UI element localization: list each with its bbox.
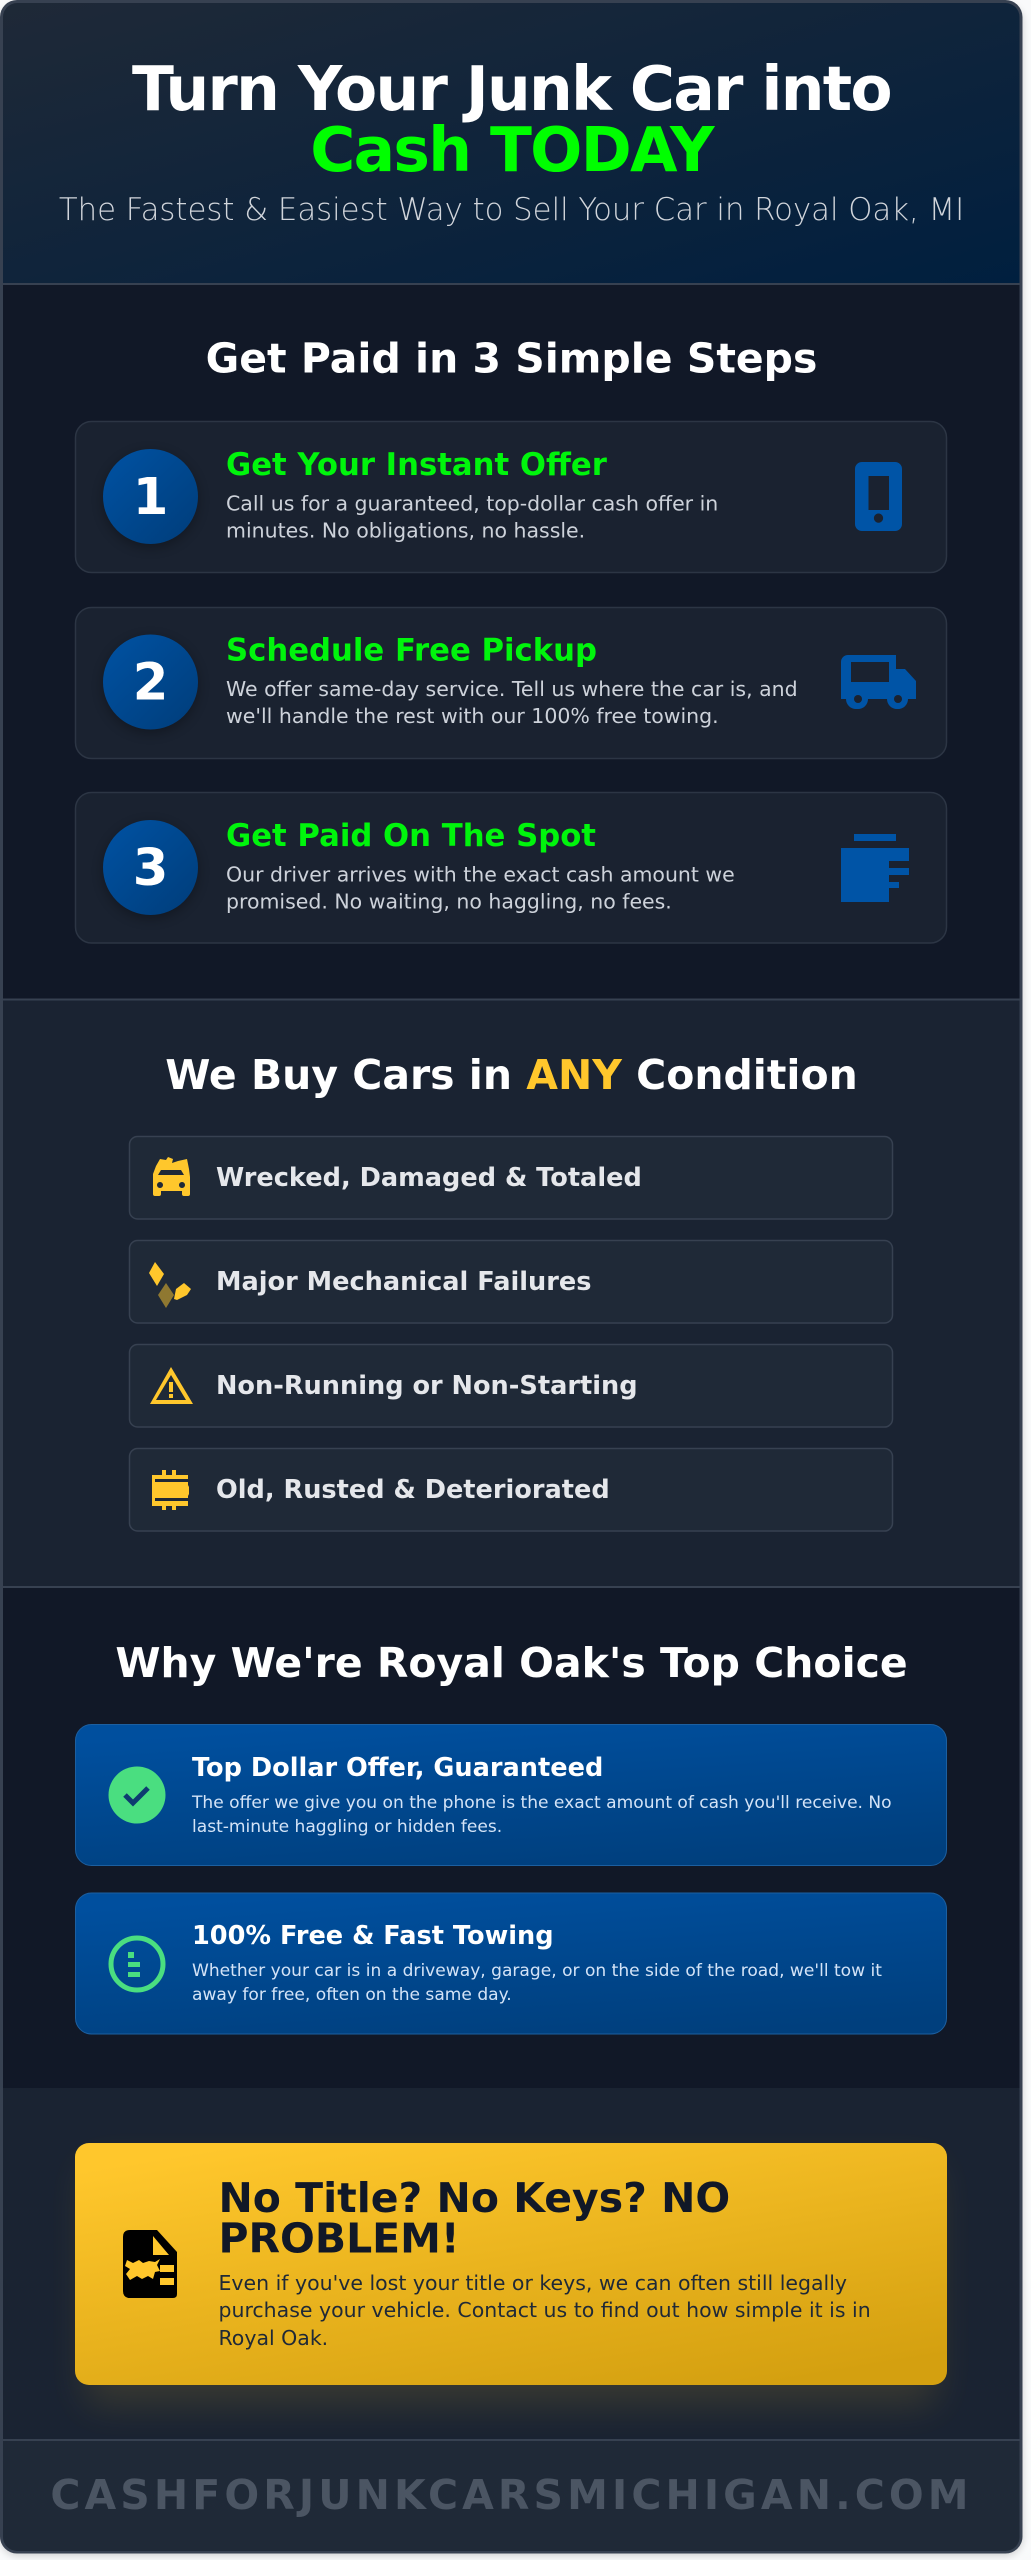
row 3 label: Non-Running or Non-Starting: [216, 1371, 638, 1401]
step number 3: 3: [133, 838, 168, 898]
panel: no title callout: [0, 2088, 1023, 2440]
icon: cash stack: [841, 834, 909, 902]
step card 2: [76, 608, 946, 758]
icon: broken parts: [149, 1262, 191, 1308]
panel: header: [0, 0, 1023, 285]
icon: wrecked car: [153, 1157, 190, 1196]
callout card: Royal Oak.: [218, 2326, 328, 2350]
benefit card 1: last-minute haggling or hidden fees.: [192, 1817, 502, 1837]
step number 1: [103, 449, 198, 548]
benefit 2 title: 100% Free & Fast Towing: [192, 1921, 554, 1951]
icon: phone: [855, 462, 902, 531]
subtitle: The Fastest & Easiest Way to Sell Your Car in Royal Oak, MI: [59, 192, 964, 228]
row 2 label: Major Mechanical Failures: [216, 1267, 591, 1297]
panel: steps: [0, 285, 1023, 999]
step card 2: we'll handle the rest with our 100% free towing.: [226, 704, 719, 728]
icon: document with X: [123, 2230, 177, 2298]
step number 2: [103, 634, 198, 733]
website url: CASHFORJUNKCARSMICHIGAN.COM: [50, 2471, 973, 2519]
step number 2: 2: [133, 652, 168, 712]
step card 1: minutes. No obligations, no hassle.: [226, 518, 585, 542]
step number 3: [103, 820, 198, 918]
step number 1: 1: [133, 467, 168, 527]
row 4 label: Old, Rusted & Deteriorated: [216, 1475, 610, 1505]
panel: conditions: [0, 998, 1023, 1587]
icon: route circle: [111, 1938, 163, 1990]
steps heading: Get Paid in 3 Simple Steps: [206, 334, 817, 382]
callout card: purchase your vehicle. Contact us to find out how simple it is in: [218, 2298, 871, 2322]
why heading: Why We're Royal Oak's Top Choice: [115, 1639, 908, 1687]
condition row 1: [130, 1136, 892, 1219]
panel: why us: [0, 1586, 1023, 2088]
conditions heading: We Buy Cars in ANY Condition: [165, 1051, 858, 1099]
step card 3: promised. No waiting, no haggling, no fees.: [226, 890, 672, 914]
benefit 1 description: The offer we give you on the phone is the exact amount of cash you'll receive. No: [191, 1793, 892, 1813]
title: Turn Your Junk Car into: [132, 54, 891, 125]
icon: rusted part: [152, 1470, 189, 1510]
icon: check circle: [108, 1766, 166, 1824]
callout glow: [85, 2165, 937, 2405]
condition row 2: [130, 1240, 892, 1323]
benefit card 2: away for free, often on the same day.: [192, 1985, 512, 2005]
step 2 description: We offer same-day service. Tell us where the car is, and: [226, 677, 798, 701]
step card 3: [76, 792, 946, 943]
condition row 3: [130, 1344, 892, 1427]
step 2 title: Schedule Free Pickup: [226, 632, 597, 668]
step 1 description: Call us for a guaranteed, top-dollar cash offer in: [226, 492, 718, 516]
row 1 label: Wrecked, Damaged & Totaled: [216, 1163, 642, 1193]
callout description: Even if you've lost your title or keys, we can often still legally: [218, 2271, 847, 2295]
benefit card 2: [76, 1893, 946, 2034]
callout card: PROBLEM!: [218, 2214, 460, 2262]
benefit 1 title: Top Dollar Offer, Guaranteed: [192, 1753, 603, 1783]
step card 1: [76, 422, 946, 572]
icon: truck: [841, 655, 916, 709]
callout title: No Title? No Keys? NO: [218, 2174, 730, 2222]
callout card: [75, 2143, 947, 2385]
panel: footer: [0, 2439, 1023, 2554]
title highlight: Cash TODAY: [310, 115, 716, 186]
icon: warning triangle: [150, 1367, 193, 1404]
benefit 2 description: Whether your car is in a driveway, garage, or on the side of the road, we'll tow it: [192, 1961, 882, 1981]
step 3 description: Our driver arrives with the exact cash amount we: [226, 862, 735, 886]
condition row 4: [130, 1448, 892, 1531]
benefit card 1: [76, 1724, 946, 1866]
step 1 title: Get Your Instant Offer: [226, 447, 608, 483]
step 3 title: Get Paid On The Spot: [226, 818, 596, 854]
